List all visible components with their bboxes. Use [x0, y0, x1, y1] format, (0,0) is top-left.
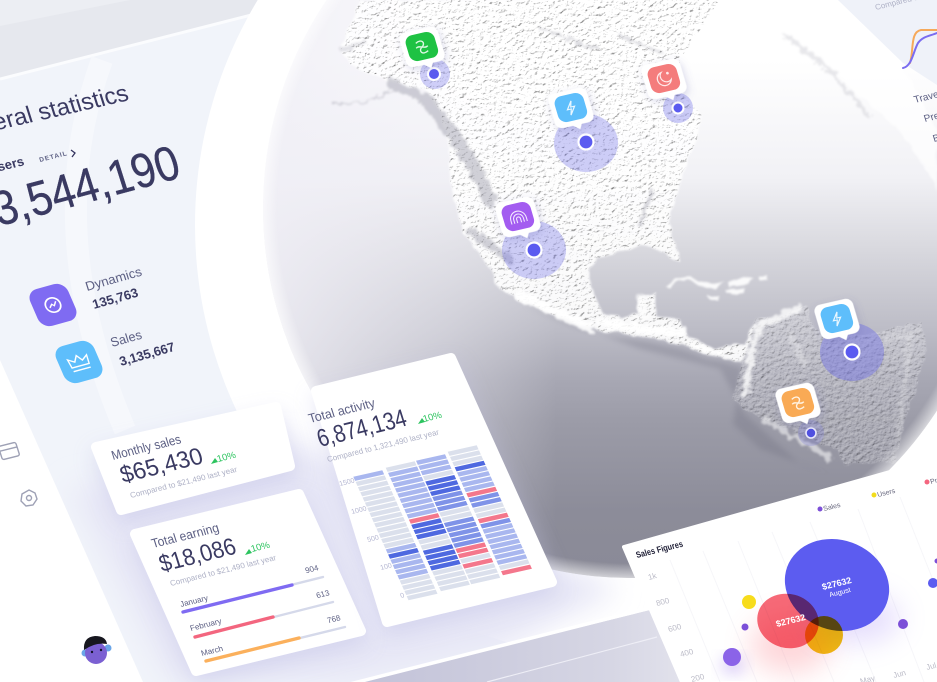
total earning caption: Compared to $21,490 last year — [169, 553, 278, 588]
total activity caption: Compared to 1,321,490 last year — [326, 428, 440, 464]
earning bars — [179, 563, 345, 661]
total earning change: 10% — [250, 540, 272, 555]
globe — [263, 0, 937, 578]
pin: andes — [774, 382, 824, 446]
axis labels: 1k — [647, 571, 658, 582]
icon: card — [0, 442, 20, 460]
dynamics value: 135,763 — [90, 285, 140, 312]
axis labels: 800 — [655, 596, 671, 608]
earning bars: March — [200, 644, 224, 658]
pin: alaska — [398, 26, 450, 89]
bubble: red — [757, 594, 819, 648]
top-left backdrop — [0, 0, 310, 79]
dynamics label: Dynamics — [83, 264, 144, 294]
total activity label: Total activity — [306, 395, 377, 426]
sales figures title: Sales Figures — [635, 539, 684, 560]
heatmap axis: 100 — [379, 562, 393, 572]
coastal shadow — [615, 336, 786, 456]
axis labels — [647, 571, 937, 682]
heatmap axis: 500 — [366, 534, 380, 544]
detail link: DETAIL — [38, 150, 69, 164]
bubble values — [775, 575, 853, 629]
heatmap axis: 0 — [399, 592, 405, 600]
total activity change: 10% — [422, 410, 444, 425]
sidebar icons — [0, 442, 37, 506]
earning bars: 613 — [315, 588, 331, 600]
pin: quebec — [640, 58, 693, 123]
map pins — [398, 26, 884, 446]
globe rim light — [263, 86, 937, 578]
top right panel — [838, 0, 937, 145]
icon: settings — [21, 490, 37, 506]
bubble values: August — [828, 587, 852, 599]
total earning label: Total earning — [149, 520, 221, 551]
line chart curves — [903, 30, 937, 68]
lower floor below panel — [338, 608, 720, 682]
terrain relief: north america — [340, 0, 755, 363]
left limb light — [265, 0, 534, 522]
legend: Sales — [822, 502, 842, 513]
icon: dynamics — [26, 281, 80, 329]
small bubbles — [723, 558, 937, 666]
total activity value: 6,874,134 — [313, 404, 410, 453]
monthly sales label: Monthly sales — [109, 431, 183, 463]
heatmap axis — [338, 477, 405, 600]
pin: mexico — [494, 196, 566, 279]
globe sphere — [263, 0, 937, 578]
top right card background — [838, 0, 937, 85]
bubble: august — [784, 539, 890, 631]
lavender floor around cards — [70, 440, 620, 682]
light curved band — [76, 60, 125, 430]
total earning value: $18,086 — [156, 533, 239, 578]
bright mountain ridges — [520, 296, 910, 458]
left sidebar — [0, 360, 143, 682]
earning bars: 768 — [326, 613, 342, 625]
heatmap axis: 1000 — [350, 505, 368, 516]
axis labels: Jun — [892, 668, 907, 680]
bubble values: $27632 — [821, 575, 853, 592]
sales label: Sales — [108, 327, 144, 350]
land base — [340, 0, 937, 465]
axis labels: 400 — [679, 647, 695, 659]
general statistics header — [0, 80, 186, 237]
axis labels: 600 — [667, 622, 683, 634]
monthly sales value: $65,430 — [117, 443, 206, 489]
legend: Users — [876, 488, 897, 499]
earning bars: February — [189, 617, 223, 633]
bubble glows — [722, 593, 900, 673]
earning bars: January — [179, 594, 209, 609]
heatmap axis: 1500 — [338, 477, 356, 488]
card: total activity — [306, 358, 552, 622]
card: total earning — [135, 494, 361, 671]
bubble: yellow — [805, 616, 843, 654]
white ring around globe — [195, 0, 937, 660]
sales stat — [52, 327, 177, 386]
bubble values: $27632 — [775, 612, 807, 629]
chart grid lines — [670, 497, 937, 682]
icon: crown — [52, 338, 106, 386]
dynamics stat — [26, 264, 144, 329]
list labels — [913, 89, 937, 145]
heatmap — [353, 445, 532, 600]
pin: canada — [547, 86, 618, 172]
avatar — [76, 629, 119, 672]
sales value: 3,135,667 — [117, 339, 177, 369]
mountain shading — [335, 28, 868, 260]
terrain relief: south america — [733, 305, 928, 465]
legend — [818, 473, 937, 513]
monthly sales caption: Compared to $21,490 last year — [129, 465, 239, 500]
earning bars: 904 — [304, 563, 320, 575]
card: monthly sales — [96, 407, 290, 510]
pin: south america — [813, 298, 884, 381]
card: sales figures — [624, 459, 937, 682]
monthly sales change: 10% — [216, 450, 238, 465]
